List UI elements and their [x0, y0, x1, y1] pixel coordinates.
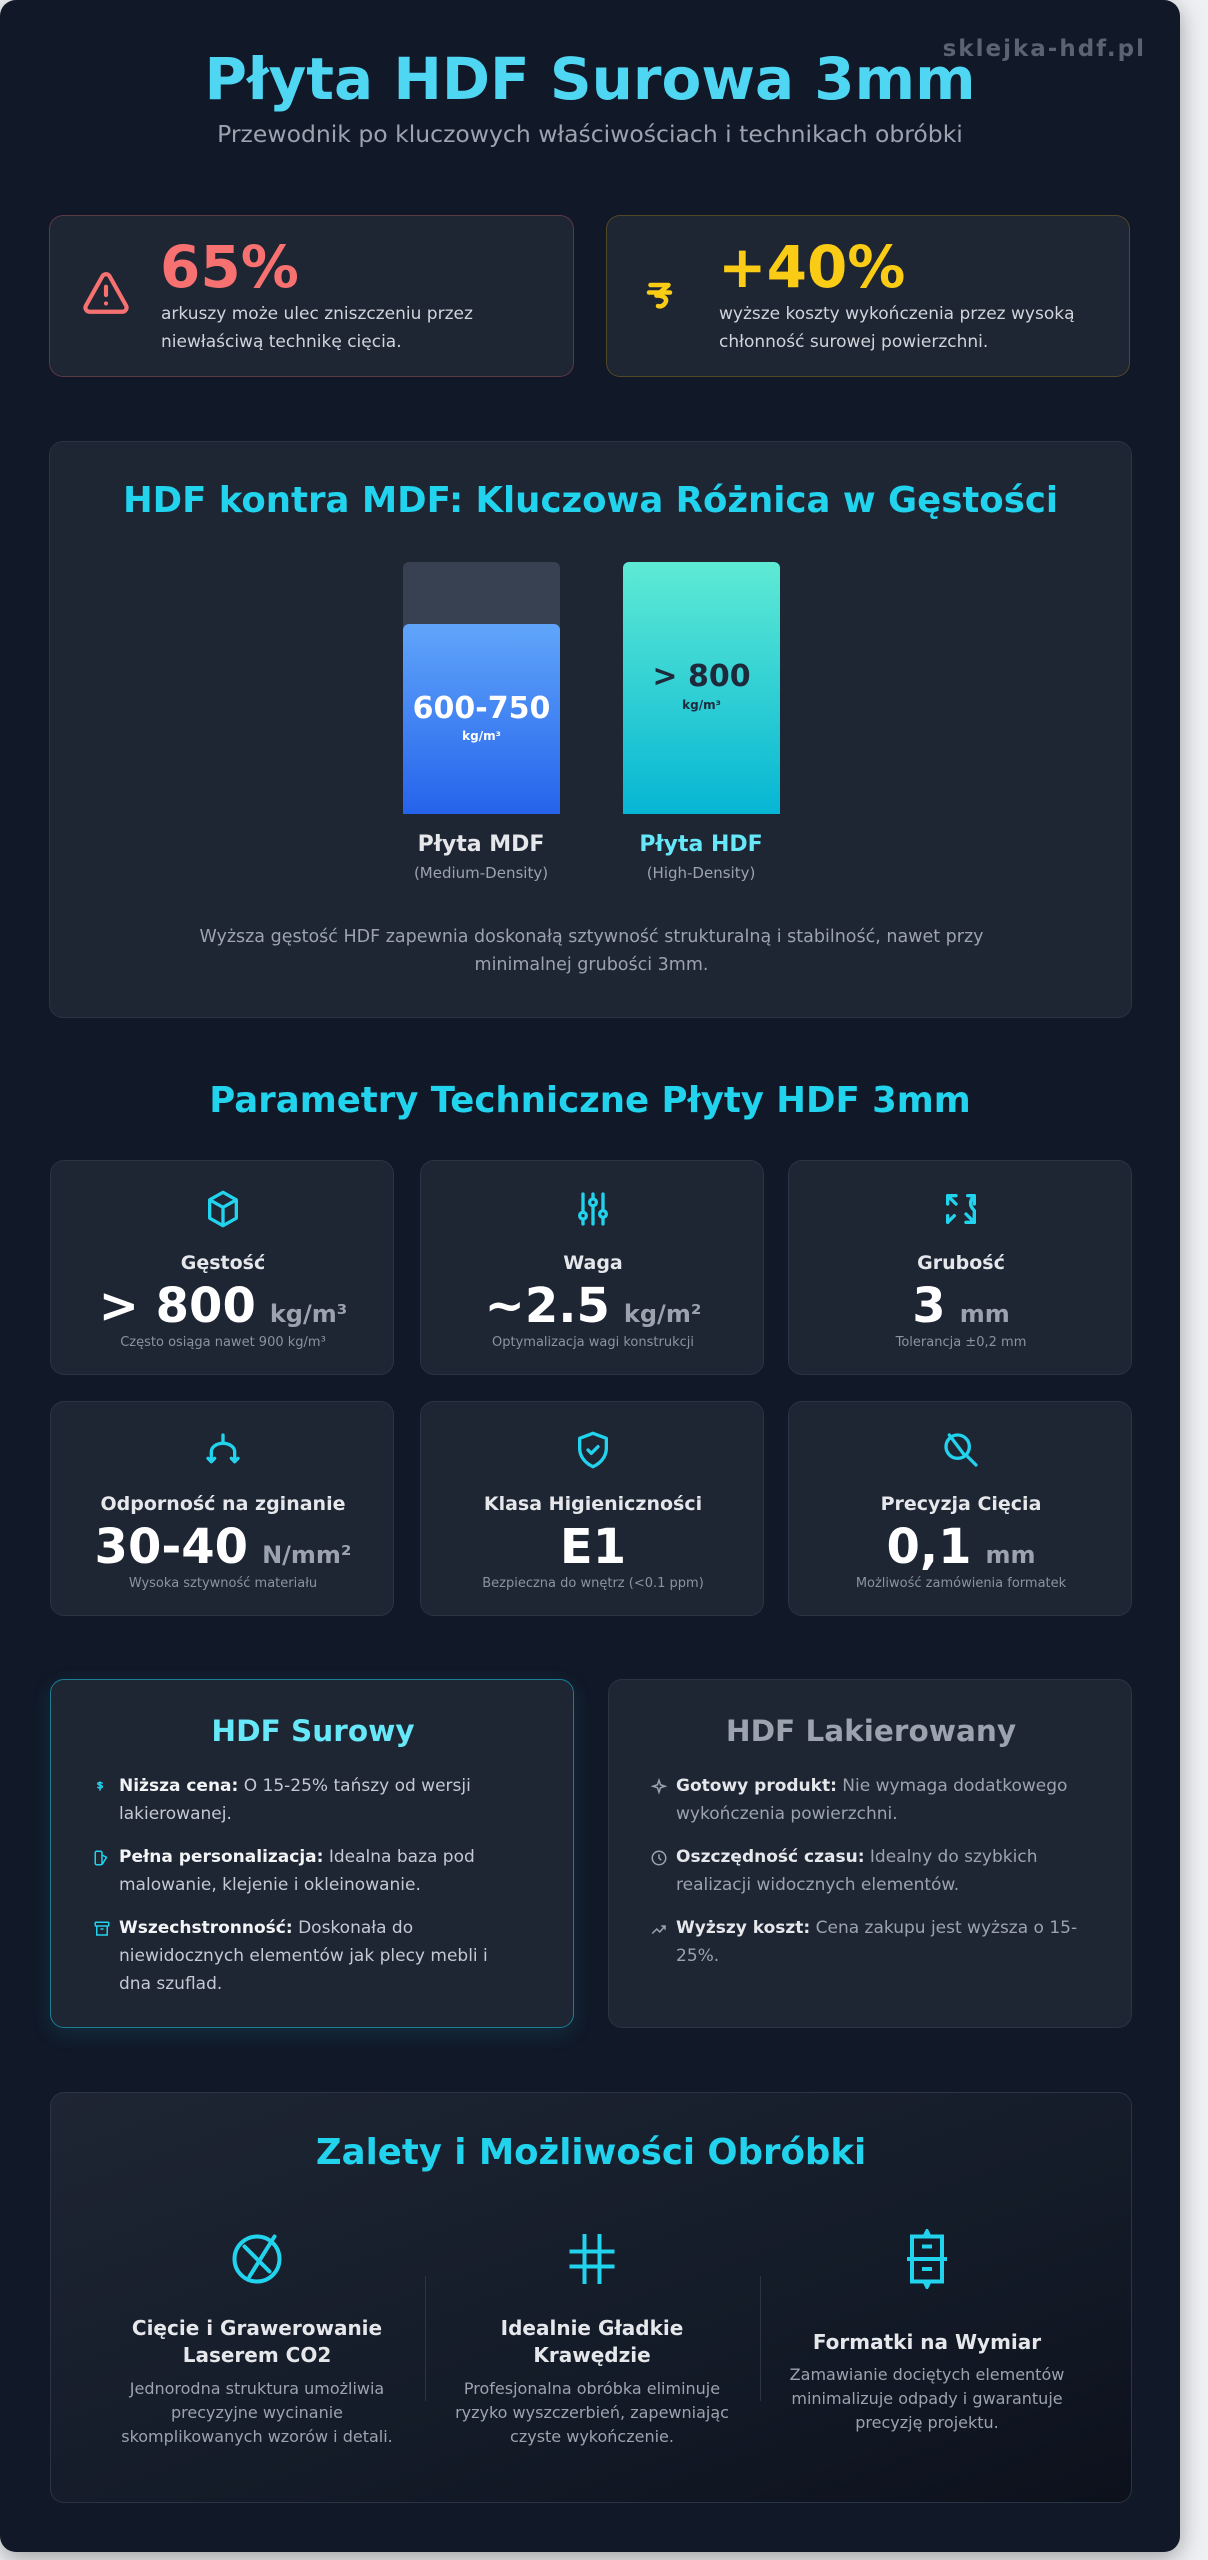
- caption: Wyższa gęstość HDF zapewnia doskonałą sztywność strukturalną i stabilność, nawet przy minimalnej grubości 3mm.: [199, 927, 984, 975]
- column: formats: Zamawianie dociętych elementów minimalizuje odpady i gwarantuje precyzję projektu.: [790, 2365, 1064, 2432]
- param card: density: [50, 1160, 394, 1375]
- stat card: 65%: [49, 215, 574, 377]
- heading: technical parameters: Parametry Techniczne Płyty HDF 3mm: [209, 1080, 971, 1121]
- bar: MDF: 600-750: [413, 691, 550, 726]
- item: time saving: Oszczędność czasu: Idealny do szybkich realizacji widocznych elementów.: [676, 1847, 1037, 1895]
- item: ready product: Gotowy produkt: Nie wymaga dodatkowego wykończenia powierzchni.: [676, 1776, 1067, 1824]
- bar: HDF: kg/m³: [682, 698, 721, 712]
- icon: sliders: [578, 1192, 608, 1226]
- panel: HDF lacquered: [608, 1679, 1132, 2028]
- bar: MDF: kg/m³: [462, 729, 501, 743]
- param card: bending: 30-40 N/mm²: [95, 1519, 351, 1575]
- stat value: +40%: [718, 233, 905, 301]
- column: laser: Jednorodna struktura umożliwia precyzyjne wycinanie skomplikowanych wzorów i detali.: [121, 2379, 393, 2446]
- param card: bending: Odporność na zginanie: [101, 1493, 345, 1515]
- param card: density: > 800 kg/m³: [99, 1278, 347, 1334]
- label: HDF: (High-Density): [647, 864, 755, 882]
- column: laser: Cięcie i Grawerowanie Laserem CO2: [132, 2316, 382, 2367]
- param card: thickness: [788, 1160, 1132, 1375]
- column: laser: [121, 2234, 393, 2446]
- bar: HDF: > 800: [652, 659, 751, 694]
- panel: density comparison: [49, 441, 1132, 1018]
- stat text: wyższe koszty wykończenia przez wysoką chłonność surowej powierzchni.: [719, 304, 1074, 352]
- param card: density: Często osiąga nawet 900 kg/m³: [120, 1335, 326, 1350]
- icon: grid: [570, 2234, 614, 2284]
- item: higher cost: Wyższy koszt: Cena zakupu jest wyższa o 15-25%.: [676, 1918, 1077, 1966]
- subtitle: Przewodnik po kluczowych właściwościach i technikach obróbki: [217, 120, 963, 148]
- icon: cut panels: [907, 2229, 947, 2289]
- watermark: sklejka-hdf.pl: [943, 36, 1146, 62]
- heading: Zalety i Możliwości Obróbki: [316, 2132, 866, 2173]
- column: edges: Profesjonalna obróbka eliminuje ryzyko wyszczerbień, zapewniając czyste wykończenie.: [455, 2379, 729, 2446]
- param card: weight: Optymalizacja wagi konstrukcji: [492, 1335, 694, 1350]
- param card: precision: Możliwość zamówienia formatek: [856, 1576, 1066, 1591]
- param card: thickness: Tolerancja ±0,2 mm: [896, 1335, 1026, 1350]
- panel: processing advantages: [50, 2092, 1132, 2503]
- param card: bending: [50, 1401, 394, 1616]
- column: edges: Idealnie Gładkie Krawędzie: [501, 2316, 683, 2367]
- item: personalisation: Pełna personalizacja: Idealna baza pod malowanie, klejenie i okleinowanie.: [119, 1847, 475, 1895]
- icon: warning: [83, 272, 129, 314]
- item: versatility: Wszechstronność: Doskonała do niewidocznych elementów jak plecy mebli i dna szuflad.: [119, 1918, 488, 1994]
- bar: MDF: [403, 562, 560, 814]
- stat value: 65%: [160, 233, 299, 301]
- label: HDF: [639, 832, 763, 882]
- label: MDF: (Medium-Density): [414, 864, 548, 882]
- item: price: Niższa cena: O 15-25% tańszy od wersji lakierowanej.: [119, 1776, 471, 1824]
- stat card: +40%: [606, 215, 1130, 377]
- column: formats: [790, 2229, 1064, 2432]
- heading: HDF Surowy: [211, 1714, 415, 1748]
- label: MDF: [414, 832, 548, 882]
- icon: laser: [232, 2234, 282, 2284]
- icon: shield check: [578, 1432, 608, 1468]
- param card: hygiene: Bezpieczna do wnętrz (<0.1 ppm): [482, 1576, 704, 1591]
- param card: hygiene: E1: [560, 1519, 626, 1575]
- icon: currency: [646, 282, 672, 309]
- param card: bending: Wysoka sztywność materiału: [129, 1576, 317, 1591]
- param card: density: Gęstość: [181, 1252, 265, 1274]
- param card: precision: Precyzja Cięcia: [881, 1493, 1041, 1515]
- icon: cube: [208, 1190, 238, 1228]
- column: edges: [455, 2234, 729, 2446]
- heading: HDF Lakierowany: [726, 1714, 1016, 1748]
- param card: precision: [788, 1401, 1132, 1616]
- icon: bend: [206, 1433, 240, 1464]
- param card: hygiene: Klasa Higieniczności: [484, 1493, 702, 1515]
- param card: thickness: 3 mm: [912, 1278, 1010, 1334]
- label: MDF: Płyta MDF: [418, 832, 544, 857]
- panel: HDF raw: [50, 1679, 574, 2028]
- stat text: arkuszy może ulec zniszczeniu przez niewłaściwą technikę cięcia.: [161, 304, 473, 352]
- title: Płyta HDF Surowa 3mm: [204, 45, 976, 113]
- param card: weight: ~2.5 kg/m²: [485, 1278, 701, 1334]
- column: formats: Formatki na Wymiar: [813, 2330, 1041, 2354]
- bar: HDF: [623, 562, 780, 814]
- label: HDF: Płyta HDF: [639, 832, 763, 857]
- heading: HDF kontra MDF: Kluczowa Różnica w Gęstości: [123, 480, 1058, 521]
- param card: weight: [420, 1160, 764, 1375]
- param card: hygiene: [420, 1401, 764, 1616]
- param card: weight: Waga: [563, 1252, 623, 1274]
- icon: arrows: [946, 1194, 976, 1224]
- param card: thickness: Grubość: [917, 1252, 1005, 1274]
- param card: precision: 0,1 mm: [886, 1519, 1036, 1575]
- icon: search: [944, 1433, 978, 1467]
